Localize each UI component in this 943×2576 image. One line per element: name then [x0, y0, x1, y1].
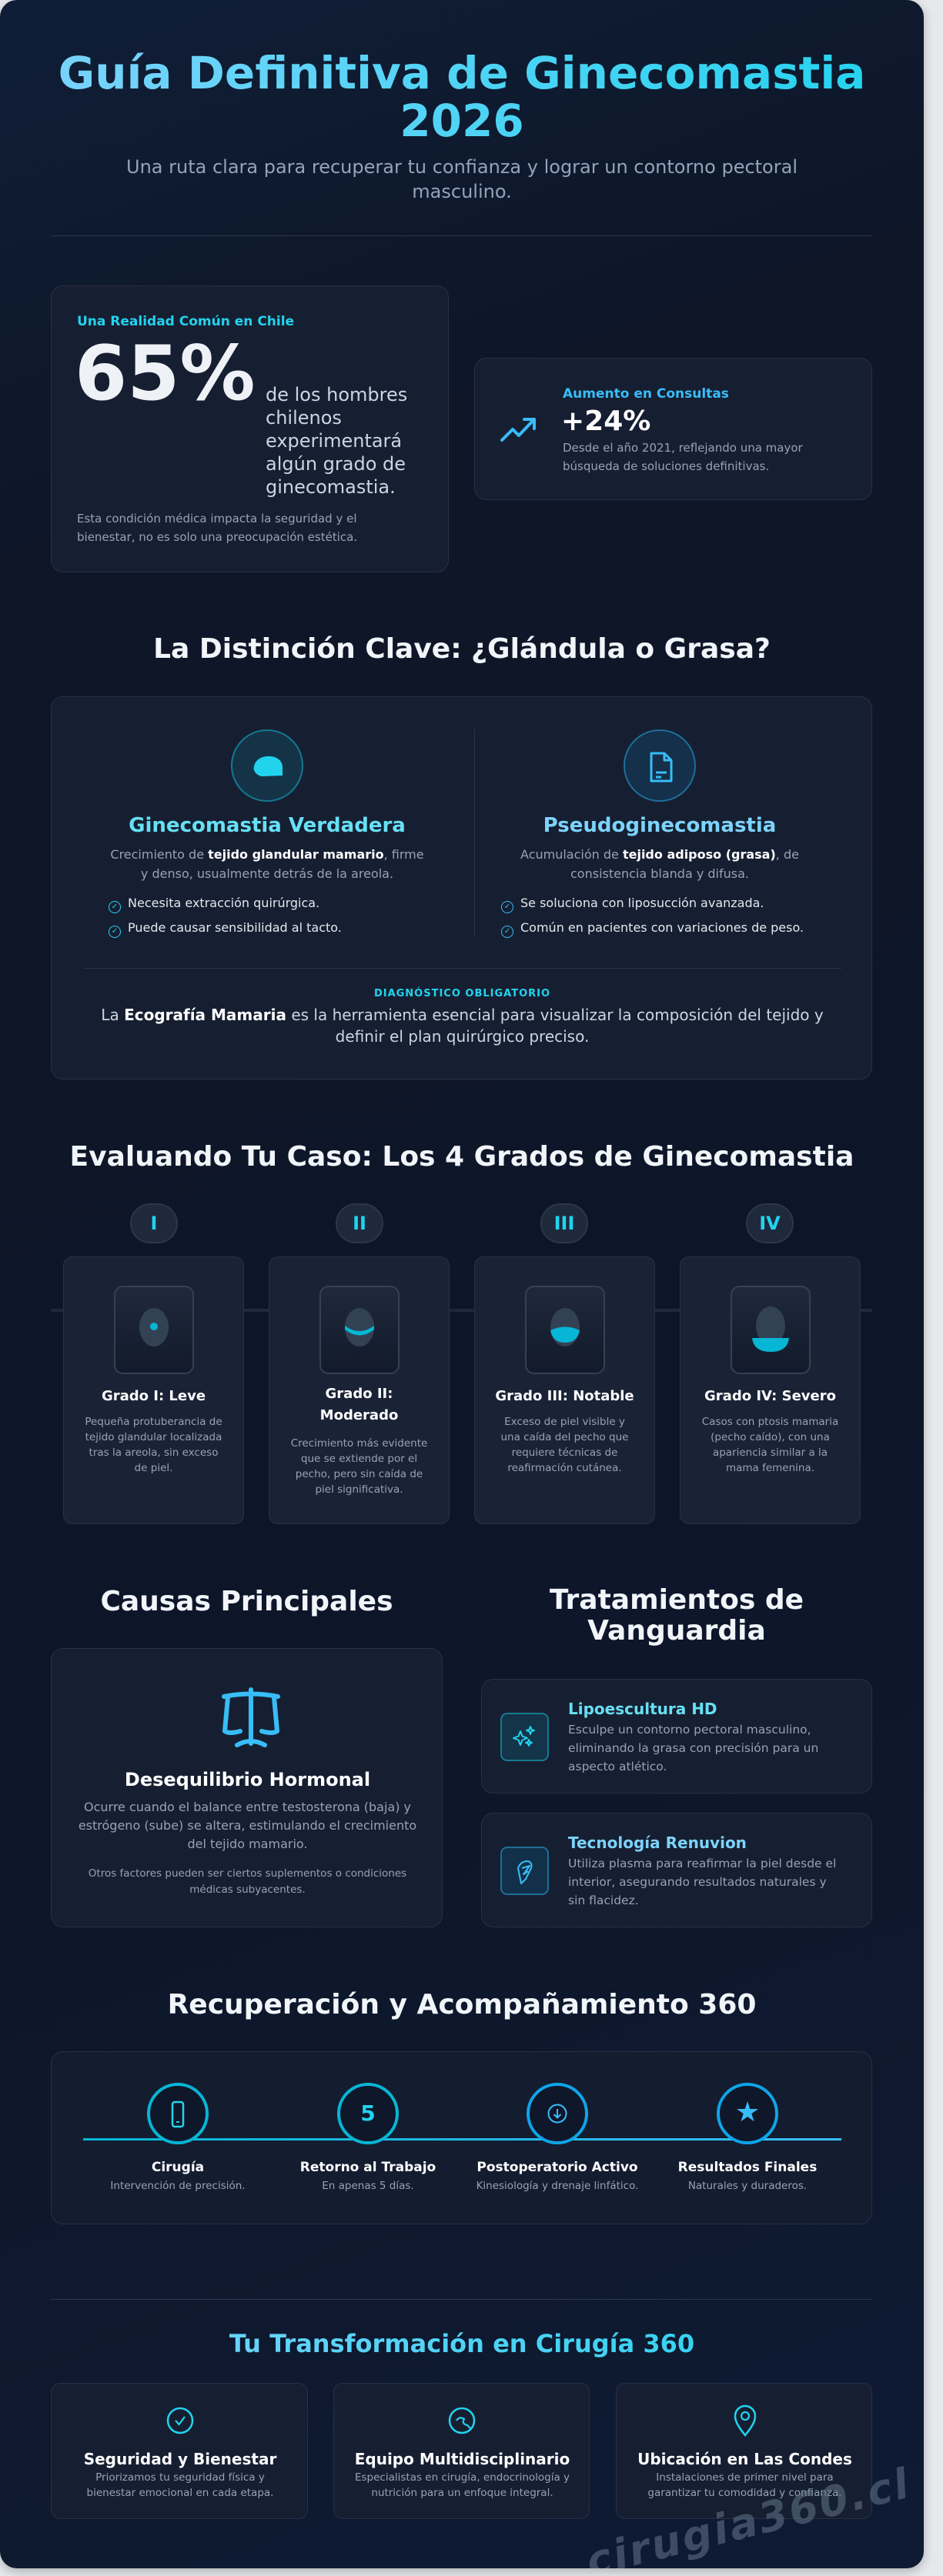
step: results	[678, 2083, 817, 2192]
cause title: Desequilibrio Hormonal	[125, 1769, 370, 1790]
icon: sparkles	[500, 1713, 549, 1761]
step: surgery: Cirugía	[152, 2160, 204, 2175]
grade badges: I	[151, 1213, 157, 1234]
label: Aumento en Consultas	[563, 386, 729, 402]
bullets: Común en pacientes con variaciones de peso.	[520, 920, 804, 935]
stat description: de los hombres chilenos experimentará algún grado de ginecomastia.	[266, 384, 407, 498]
callout: diagnosis: La Ecografía Mamaria es la herramienta esencial para visualizar la composición del tejido y definir el plan quirúrgico preciso.	[101, 1006, 824, 1046]
grade card II: Grado II:	[326, 1386, 393, 1402]
icon: map pin	[734, 2405, 756, 2437]
grade card IV: Casos con ptosis mamaria (pecho caído), con una apariencia similar a la mama femenina.	[702, 1416, 838, 1474]
bullets: Puede causar sensibilidad al tacto.	[128, 920, 342, 935]
bullets: ✓	[504, 903, 510, 911]
illustration	[114, 1286, 194, 1374]
bullets	[501, 896, 804, 938]
column: verdadera	[109, 729, 424, 938]
card: safety: Priorizamos tu seguridad física y bienestar emocional en cada etapa.	[87, 2471, 273, 2499]
card: team: Especialistas en cirugía, endocrinología y nutrición para un enfoque integral.	[355, 2471, 570, 2499]
step: return to work: 5	[360, 2101, 376, 2126]
treatment card: renuvion: Utiliza plasma para reafirmar la piel desde el interior, asegurando resultados naturales y sin flacidez.	[568, 1857, 836, 1907]
icon: plasma	[500, 1847, 549, 1895]
heading: treatments: Tratamientos de Vanguardia	[550, 1584, 804, 1647]
step: return to work: En apenas 5 días.	[322, 2180, 414, 2192]
description: Desde el año 2021, reflejando una mayor búsqueda de soluciones definitivas.	[563, 441, 803, 473]
bullets: ✓	[112, 903, 118, 911]
heading: causes: Causas Principales	[100, 1586, 393, 1617]
card: location: Instalaciones de primer nivel para garantizar tu comodidad y confianza.	[647, 2471, 842, 2499]
note: Otros factores pueden ser ciertos suplementos o condiciones médicas subyacentes.	[89, 1867, 406, 1896]
step: postop: Kinesiología y drenaje linfático.	[477, 2180, 638, 2192]
description: Crecimiento de tejido glandular mamario, firme y denso, usualmente detrás de la areola.	[110, 847, 424, 881]
bullets: Se soluciona con liposucción avanzada.	[520, 896, 764, 910]
grade card IV: Grado IV: Severo	[704, 1388, 836, 1404]
title: 2026	[400, 95, 524, 147]
icon: trending up	[500, 418, 536, 442]
step: return to work: Retorno al Trabajo	[300, 2160, 436, 2175]
bullets: Necesita extracción quirúrgica.	[128, 896, 319, 910]
step: surgery	[110, 2083, 246, 2192]
card: location	[616, 2383, 872, 2519]
grade card III: Grado III: Notable	[495, 1388, 634, 1404]
title	[0, 49, 924, 145]
grade card IV	[680, 1256, 861, 1524]
illustration	[319, 1286, 400, 1374]
treatment card: lipo: Lipoescultura HD	[568, 1700, 717, 1718]
heading: distinction: La Distinción Clave: ¿Glándula o Grasa?	[153, 633, 771, 665]
stat card: 65%	[51, 285, 449, 572]
panel: causes	[51, 1648, 443, 1927]
grade card I	[63, 1256, 244, 1524]
stat label: Una Realidad Común en Chile	[77, 314, 294, 329]
grade card II	[269, 1256, 450, 1524]
description: Acumulación de tejido adiposo (grasa), de consistencia blanda y difusa.	[520, 847, 799, 881]
subtitle: Una ruta clara para recuperar tu confianza y lograr un contorno pectoral masculino.	[126, 156, 798, 202]
illustration	[731, 1286, 811, 1374]
title: Guía Definitiva de Ginecomastia	[59, 47, 865, 99]
card: team	[333, 2383, 590, 2519]
step: return to work	[300, 2083, 436, 2192]
card: location: Ubicación en Las Condes	[637, 2450, 852, 2468]
grade card II: Crecimiento más evidente que se extiende por el pecho, pero sin caída de piel significativa.	[291, 1437, 427, 1496]
heading: transformation: Tu Transformación en Cirugía 360	[229, 2329, 694, 2358]
treatment card: lipo	[481, 1679, 872, 1794]
grade badges: II	[353, 1213, 366, 1234]
card: safety: Seguridad y Bienestar	[84, 2450, 276, 2468]
panel: distinction	[51, 696, 872, 1079]
grade badges: IV	[759, 1213, 781, 1234]
step: postop	[477, 2083, 638, 2192]
stat card: +24%	[474, 358, 872, 500]
icon: gland	[231, 729, 303, 802]
bullets: ✓	[504, 927, 510, 936]
callout: diagnosis	[101, 986, 824, 1046]
grade card II: Moderado	[320, 1407, 398, 1423]
value: +24%	[561, 405, 650, 437]
stat note: Esta condición médica impacta la seguridad y el bienestar, no es solo una preocupación estética.	[77, 512, 357, 544]
panel: recovery timeline	[51, 2051, 872, 2224]
heading: grades: Evaluando Tu Caso: Los 4 Grados de Ginecomastia	[70, 1141, 854, 1173]
step: postop: Postoperatorio Activo	[477, 2160, 638, 2175]
step: results: ★	[735, 2097, 760, 2128]
icon: check circle	[166, 2407, 194, 2434]
heading: transformation	[0, 2328, 924, 2359]
treatment card: renuvion: Tecnología Renuvion	[568, 1834, 747, 1852]
card: team: Equipo Multidisciplinario	[355, 2450, 570, 2468]
grade card I: Pequeña protuberancia de tejido glandular localizada tras la areola, sin exceso de piel.	[85, 1416, 222, 1474]
grade card I: Grado I: Leve	[102, 1388, 206, 1404]
grade badges	[130, 1203, 794, 1243]
icon: document	[624, 729, 696, 802]
treatment card: lipo: Esculpe un contorno pectoral masculino, eliminando la grasa con precisión para un aspecto atlético.	[568, 1723, 818, 1774]
step: results: Naturales y duraderos.	[688, 2180, 807, 2192]
grade card III: Exceso de piel visible y una caída del pecho que requiere técnicas de reafirmación cutánea.	[500, 1416, 628, 1474]
treatment card: renuvion	[481, 1813, 872, 1927]
heading: recovery: Recuperación y Acompañamiento 360	[168, 1989, 756, 2020]
big number: 65%	[75, 330, 256, 418]
heading: Ginecomastia Verdadera	[129, 814, 406, 837]
heading: Pseudoginecomastia	[543, 814, 776, 837]
grade badges: III	[554, 1213, 574, 1234]
bullets	[109, 896, 342, 938]
column: pseudo	[501, 729, 804, 938]
illustration	[525, 1286, 605, 1374]
step: surgery: Intervención de precisión.	[110, 2180, 246, 2192]
bullets: ✓	[112, 927, 118, 936]
step: results: Resultados Finales	[678, 2160, 817, 2175]
cause text: Ocurre cuando el balance entre testosterona (baja) y estrógeno (sube) se altera, estimulando el crecimiento del tejido mamario.	[79, 1800, 416, 1851]
grade card III	[474, 1256, 655, 1524]
icon: stethoscope circle	[448, 2407, 476, 2434]
card: safety	[51, 2383, 308, 2519]
callout: diagnosis: DIAGNÓSTICO OBLIGATORIO	[374, 988, 550, 999]
icon: scale	[222, 1687, 280, 1747]
